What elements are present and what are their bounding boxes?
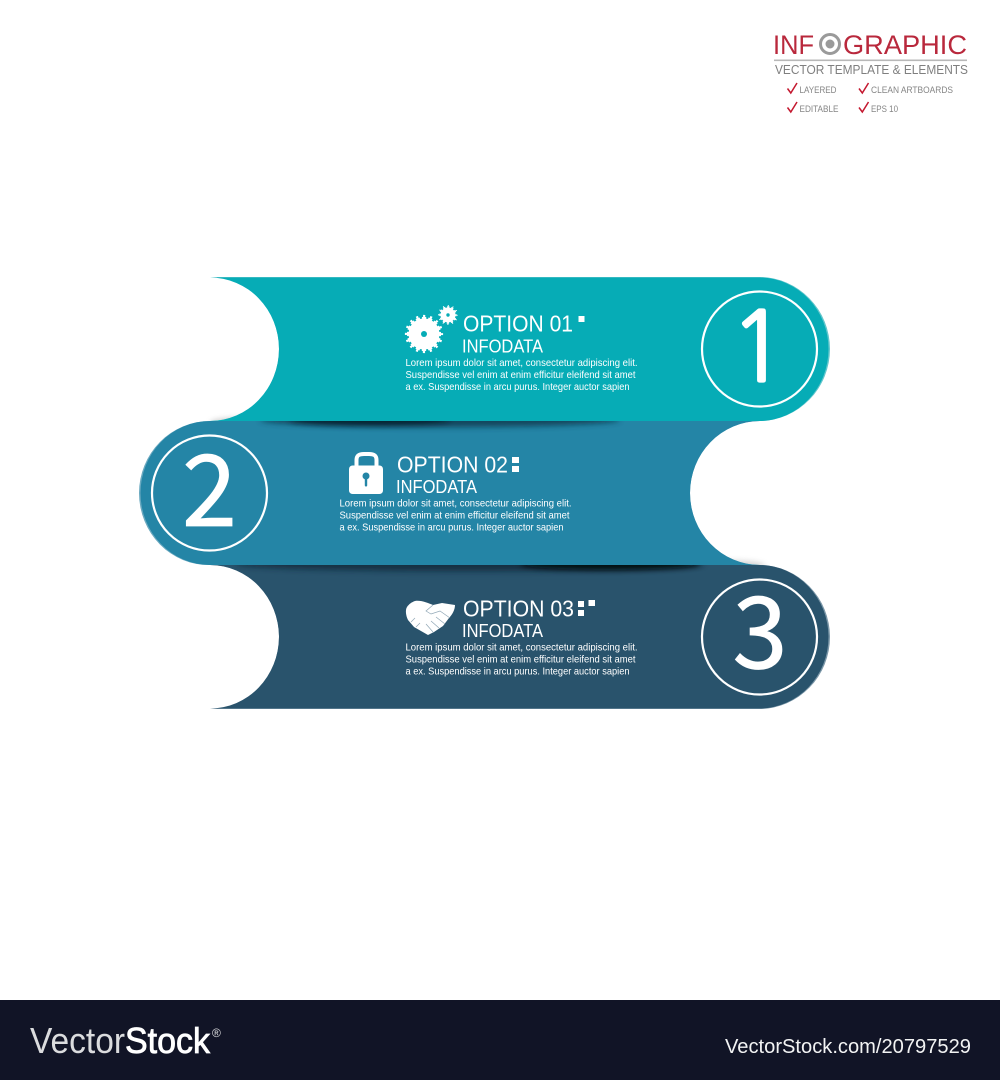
body text 1 xyxy=(406,357,638,393)
panel: option 02 band xyxy=(139,411,760,565)
number badge 3 xyxy=(702,553,817,697)
small gear xyxy=(439,306,457,324)
logo checklist: LAYERED xyxy=(800,85,837,95)
icon: padlock xyxy=(349,454,383,494)
footer brand: ® xyxy=(212,1026,221,1040)
number badge 1: 1 xyxy=(729,299,788,395)
logo subtitle: VECTOR TEMPLATE & ELEMENTS xyxy=(775,62,968,77)
number badge 3: 3 xyxy=(733,553,787,697)
logo checklist: CLEAN ARTBOARDS xyxy=(871,85,953,95)
heading: option 01: OPTION 01 xyxy=(463,310,573,336)
heading: option 02: OPTION 02 xyxy=(397,452,508,478)
markers: three squares xyxy=(578,600,595,616)
body text 2: Suspendisse vel enim at enim efficitur eleifend sit amet xyxy=(340,510,570,522)
body text 2: a ex. Suspendisse in arcu purus. Integer auctor sapien xyxy=(340,522,564,534)
number badge 1 xyxy=(702,292,817,406)
large gear xyxy=(406,316,442,352)
body text 3: Lorem ipsum dolor sit amet, consectetur adipiscing elit. xyxy=(406,642,638,654)
footer image id: VectorStock.com/20797529 xyxy=(725,1036,971,1058)
logo wordmark xyxy=(773,30,967,60)
logo checklist xyxy=(788,83,953,114)
footer brand xyxy=(30,1020,221,1061)
body text 3: a ex. Suspendisse in arcu purus. Integer auctor sapien xyxy=(406,666,630,678)
panel: option 01 band xyxy=(210,277,830,421)
body text 3: Suspendisse vel enim at enim efficitur eleifend sit amet xyxy=(406,654,636,666)
icon: gears xyxy=(406,306,457,352)
footer brand: Stock xyxy=(125,1020,211,1061)
icon: handshake xyxy=(406,601,455,635)
body text 2 xyxy=(340,498,572,534)
body text 1: Suspendisse vel enim at enim efficitur eleifend sit amet xyxy=(406,369,636,381)
body text 3 xyxy=(406,642,638,678)
body text 2: Lorem ipsum dolor sit amet, consectetur adipiscing elit. xyxy=(340,498,572,510)
footer bar xyxy=(0,1000,1000,1080)
number badge 2: 2 xyxy=(182,411,237,555)
subheading: infodata 1: INFODATA xyxy=(462,336,543,356)
logo checklist: EDITABLE xyxy=(800,104,838,114)
subheading: infodata 2: INFODATA xyxy=(396,477,477,497)
logo: infographic template badge xyxy=(773,30,968,114)
subheading: infodata 3: INFODATA xyxy=(462,621,543,641)
body text 1: a ex. Suspendisse in arcu purus. Integer auctor sapien xyxy=(406,381,630,393)
marker: one square xyxy=(578,316,584,322)
heading: option 03: OPTION 03 xyxy=(463,596,574,622)
logo checklist: EPS 10 xyxy=(871,104,898,114)
panel: option 03 band xyxy=(210,553,830,709)
body text 1: Lorem ipsum dolor sit amet, consectetur adipiscing elit. xyxy=(406,357,638,369)
logo wordmark: GRAPHIC xyxy=(843,30,967,60)
logo wordmark: INF xyxy=(773,30,814,60)
number badge 2 xyxy=(152,411,267,555)
markers: two squares xyxy=(512,457,519,472)
footer brand: Vector xyxy=(30,1020,125,1061)
